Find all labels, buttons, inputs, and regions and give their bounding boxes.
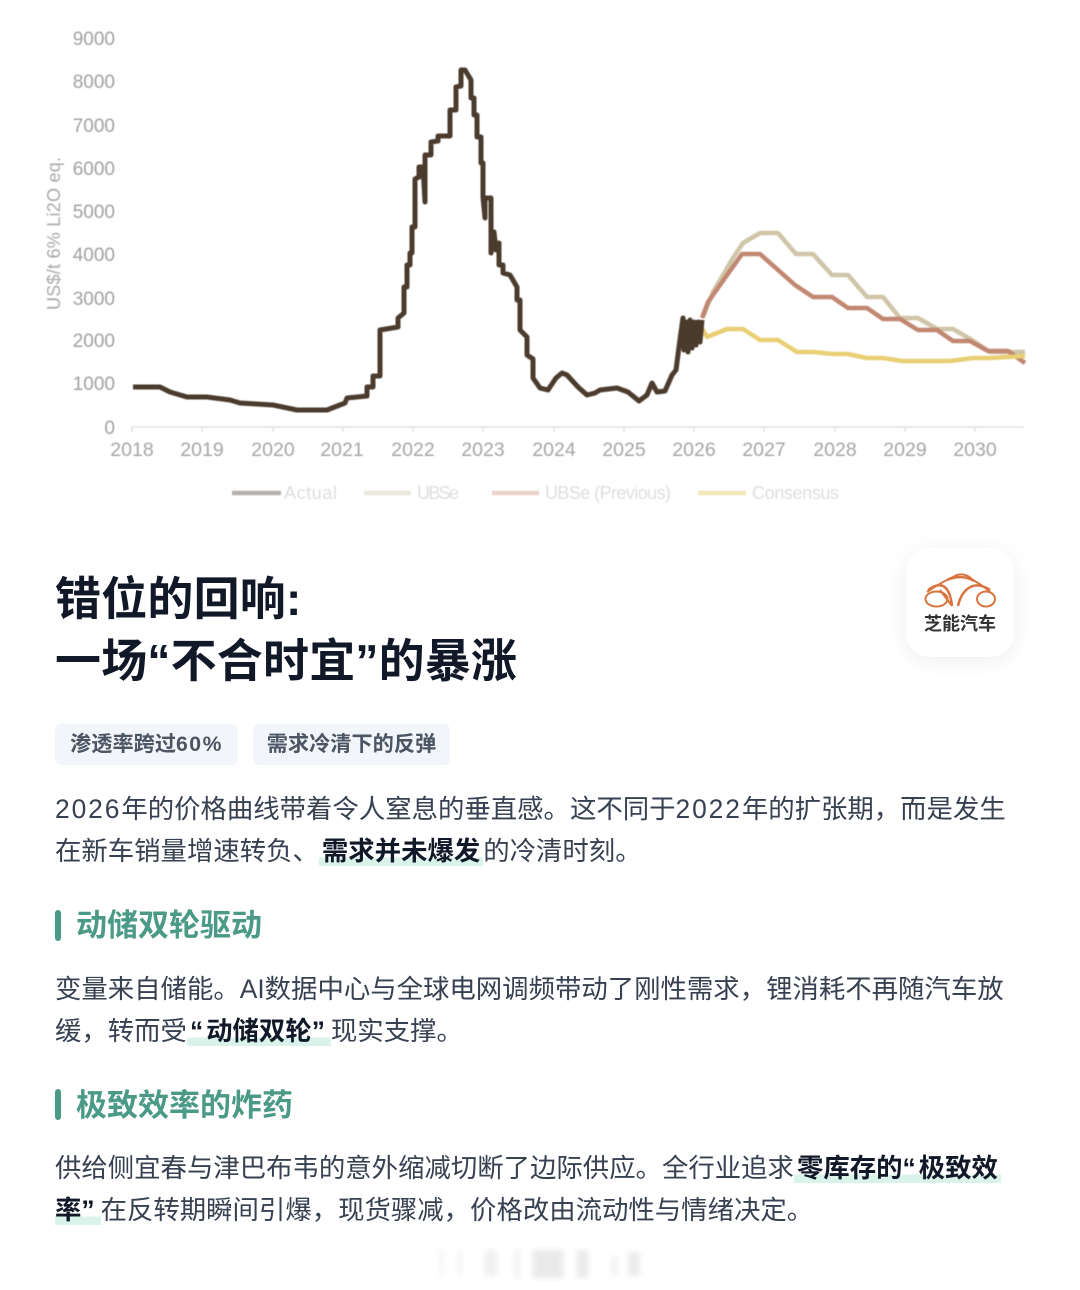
x axis: 2024 [532, 439, 576, 461]
tag: rebound: 需求冷清下的反弹 [267, 733, 436, 756]
paragraph: section 2: 率”在反转期瞬间引爆，现货骤减，价格改由流动性与情绪决定。 [55, 1195, 813, 1225]
y axis labels: 5000 [73, 202, 115, 223]
logo text: 芝能汽车 [924, 614, 996, 634]
y axis labels: 9000 [73, 29, 115, 50]
y axis labels: 7000 [73, 116, 115, 137]
legend: UBSe (Previous) [545, 483, 671, 503]
accent bar: section 1 [55, 910, 61, 941]
x axis: 2020 [251, 439, 295, 461]
intro paragraph [55, 794, 1006, 866]
x axis: 2026 [672, 439, 716, 461]
series: Actual [133, 70, 702, 410]
tag: penetration: 渗透率跨过60% [70, 733, 223, 756]
y axis labels: 3000 [73, 289, 115, 310]
title [55, 573, 517, 687]
title: 一场“不合时宜”的暴涨 [55, 635, 517, 687]
x axis: 2021 [320, 439, 364, 461]
intro paragraph: 在新车销量增速转负、需求并未爆发的冷清时刻。 [55, 836, 642, 866]
x axis: 2018 [110, 439, 154, 461]
legend: UBSe [417, 483, 459, 503]
y axis labels: 6000 [73, 159, 115, 180]
y axis labels: 8000 [73, 72, 115, 93]
y axis labels: 0 [104, 418, 115, 439]
x axis: 2029 [883, 439, 927, 461]
legend [232, 483, 839, 503]
paragraph: section 2: 供给侧宜春与津巴布韦的意外缩减切断了边际供应。全行业追求零库存的“极致效 [55, 1153, 998, 1183]
series: UBSe [703, 233, 1025, 352]
logo card [906, 548, 1014, 657]
x axis: 2025 [602, 439, 646, 461]
y axis labels: 2000 [73, 331, 115, 352]
legend: Actual [284, 483, 337, 503]
paragraph: section 1 [55, 974, 1004, 1046]
tag: rebound [253, 724, 450, 765]
x axis: 2028 [813, 439, 857, 461]
x axis: 2022 [391, 439, 435, 461]
icon: car logo [924, 573, 996, 608]
x axis [110, 427, 1024, 461]
y axis title: US$/t 6% Li2O eq. [44, 157, 64, 310]
blurred watermark [486, 1249, 640, 1279]
title: 错位的回响: [55, 573, 302, 625]
line chart: lithium price [44, 29, 1027, 504]
heading: section 1: 动储双轮驱动 [76, 908, 262, 943]
y axis labels [73, 29, 115, 439]
paragraph: section 1: 缓，转而受“动储双轮”现实支撑。 [55, 1016, 463, 1046]
x axis: 2023 [461, 439, 505, 461]
paragraph: section 1: 变量来自储能。AI数据中心与全球电网调频带动了刚性需求，锂消耗不再随汽车放 [55, 974, 1004, 1004]
series: Consensus [700, 325, 1025, 361]
series: UBSe previous [702, 254, 1025, 363]
intro paragraph: 2026年的价格曲线带着令人窒息的垂直感。这不同于2022年的扩张期，而是发生 [55, 794, 1006, 824]
paragraph: section 2 [55, 1153, 1001, 1225]
legend: Consensus [752, 483, 839, 503]
y axis labels: 1000 [73, 374, 115, 395]
x axis: 2019 [180, 439, 224, 461]
heading: section 2: 极致效率的炸药 [76, 1088, 293, 1123]
y axis labels: 4000 [73, 245, 115, 266]
tag: penetration [55, 724, 238, 765]
x axis: 2027 [742, 439, 786, 461]
accent bar: section 2 [55, 1089, 61, 1120]
x axis: 2030 [953, 439, 997, 461]
